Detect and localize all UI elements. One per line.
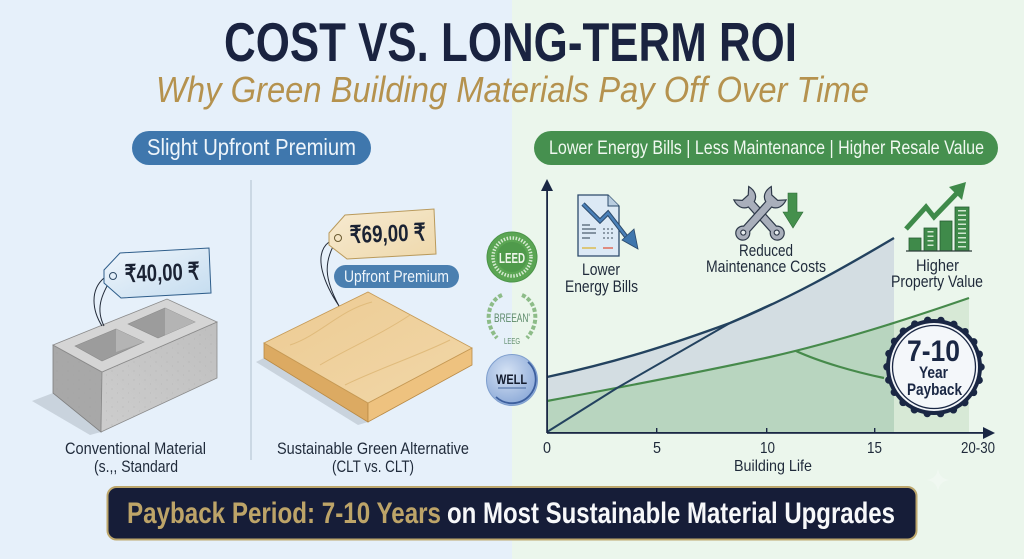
tick labels — [543, 440, 995, 475]
line chart — [541, 179, 995, 475]
badge: payback seal: Year — [919, 363, 948, 382]
label: lower energy bills — [565, 260, 638, 296]
tick labels: 5 — [653, 440, 661, 457]
label: reduced maintenance costs: Reduced — [739, 241, 793, 260]
area: grey under energy curve — [547, 238, 894, 432]
curve: straight cost line — [547, 304, 772, 432]
area: green under value curve — [547, 322, 894, 432]
label: lower energy bills: Energy Bills — [565, 277, 638, 296]
pill: long-term benefits — [534, 131, 998, 165]
label: higher property value: Property Value — [891, 272, 983, 291]
banner: payback period — [108, 487, 916, 540]
badge: LEED — [487, 232, 537, 282]
tick labels: 10 — [760, 440, 775, 457]
price tag: conventional — [94, 248, 211, 326]
tick labels: 15 — [867, 440, 882, 457]
badge: BREEAM: BREEAN' — [494, 311, 530, 325]
pill: slight upfront premium: Slight Upfront Premium — [147, 134, 356, 160]
label: lower energy bills: Lower — [582, 260, 620, 279]
pill: slight upfront premium — [132, 131, 371, 165]
tick labels: 0 — [543, 440, 551, 457]
sparkle — [926, 468, 950, 492]
label: sustainable alternative — [277, 439, 469, 476]
price tag: conventional: ₹40,00 ₹ — [124, 258, 200, 288]
badge: LEED: LEED — [499, 250, 525, 267]
badge: payback seal: 7-10 — [907, 335, 960, 368]
label: sustainable alternative: (CLT vs. CLT) — [332, 457, 414, 476]
subtitle: Why Green Building Materials Pay Off Over Time — [156, 69, 869, 110]
curve: branch — [796, 351, 884, 378]
pill: upfront premium — [334, 265, 459, 288]
label: conventional material: (s.,, Standard — [94, 457, 178, 476]
area: lighter green extension — [894, 298, 969, 432]
badge: payback seal — [886, 319, 982, 415]
price tag: green alternative — [321, 209, 436, 306]
badge: WELL — [486, 354, 538, 406]
label: reduced maintenance costs: Maintenance Costs — [706, 257, 826, 276]
icon: concrete block — [32, 299, 217, 435]
icon: property value — [906, 182, 972, 251]
background: left panel — [0, 0, 512, 559]
badge: BREEAM: LEEG — [504, 337, 520, 346]
icon: wrenches with down arrow — [730, 186, 803, 246]
label: conventional material — [65, 439, 206, 476]
price tag: green alternative: ₹69,00 ₹ — [349, 219, 426, 249]
icon: energy bill — [578, 195, 638, 256]
label: reduced maintenance costs — [706, 241, 826, 276]
title: COST VS. LONG-TERM ROI — [224, 11, 797, 73]
tick labels: 20-30 — [961, 440, 995, 457]
label: higher property value — [891, 256, 983, 291]
icon: wood panel — [256, 292, 472, 425]
banner: payback period: Payback Period: 7-10 Years — [127, 497, 441, 530]
label: conventional material: Conventional Material — [65, 439, 206, 458]
background: right panel — [512, 0, 1024, 559]
pill: upfront premium: Upfront Premium — [344, 268, 449, 286]
badge: BREEAM — [489, 295, 535, 346]
axes — [541, 179, 995, 439]
badge: payback seal: Payback — [907, 380, 962, 399]
curve: energy savings — [547, 238, 894, 377]
banner: payback period: on Most Sustainable Material Upgrades — [447, 497, 895, 530]
curve: value — [547, 298, 969, 401]
label: sustainable alternative: Sustainable Green Alternative — [277, 439, 469, 458]
label: higher property value: Higher — [916, 256, 959, 275]
badge: WELL: WELL — [496, 371, 527, 387]
tick labels: Building Life — [734, 458, 812, 475]
divider — [250, 180, 252, 460]
